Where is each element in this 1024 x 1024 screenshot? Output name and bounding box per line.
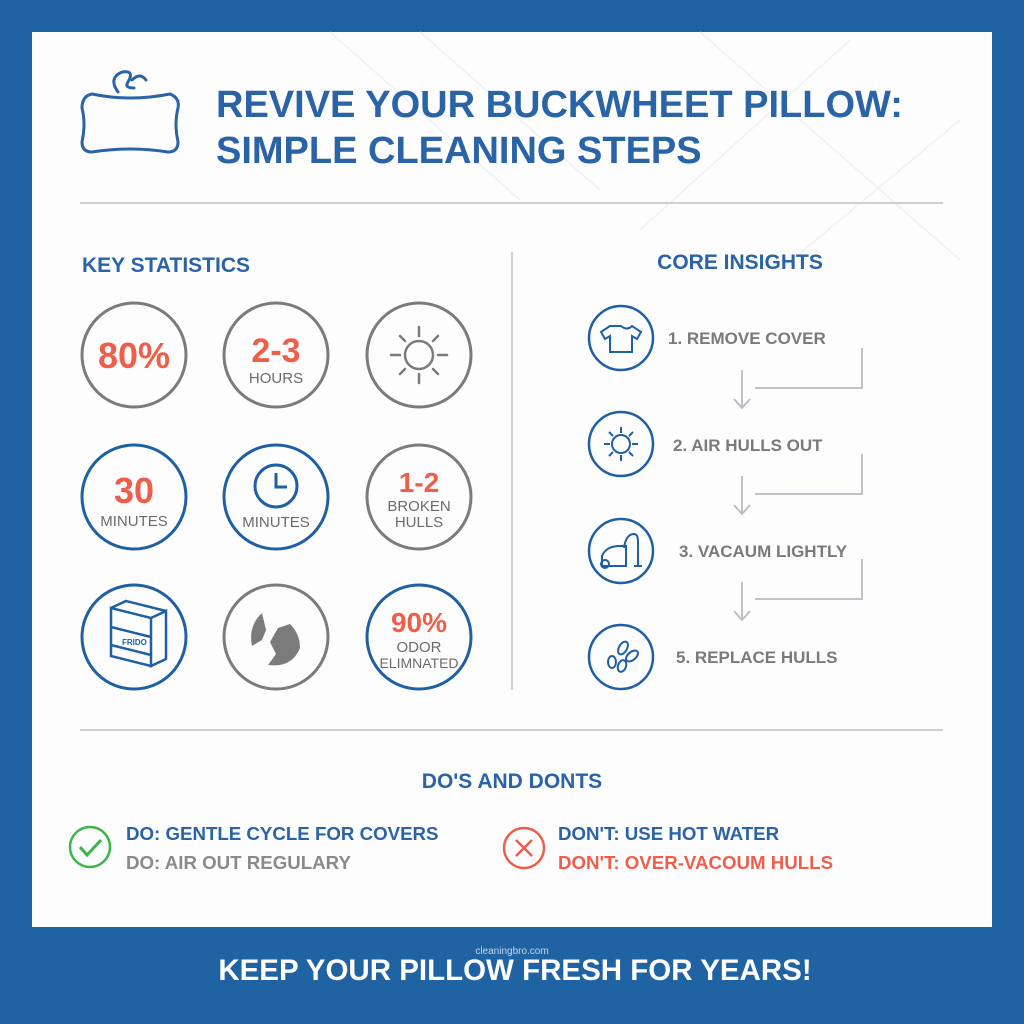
title: REVIVE YOUR BUCKWHEET PILLOW: (216, 84, 903, 126)
panel: statistics grid: HULLS (395, 514, 443, 531)
icon: shirt (601, 326, 641, 352)
text: KEEP YOUR PILLOW FRESH FOR YEARS! (218, 954, 812, 987)
panel: statistics grid: MINUTES (242, 514, 310, 531)
panel: steps flow: 5. REPLACE HULLS (676, 648, 838, 667)
heading: key statistics: KEY STATISTICS (82, 254, 250, 277)
icon: seeds (608, 640, 640, 673)
heading: core insights: CORE INSIGHTS (657, 251, 823, 274)
icon: vacuum (601, 534, 642, 568)
title (216, 84, 903, 172)
icon: box (111, 601, 166, 666)
arrows (734, 348, 862, 620)
panel: statistics grid: 1-2 (399, 467, 439, 498)
dont list: DON'T: OVER-VACOUM HULLS (558, 852, 833, 873)
do list (70, 823, 439, 873)
icon: box: FRIDO (122, 638, 147, 647)
do list: DO: GENTLE CYCLE FOR COVERS (126, 823, 439, 844)
icon: sun small (604, 427, 638, 461)
panel: steps flow: 3. VACAUM LIGHTLY (679, 542, 848, 561)
panel: statistics grid: 2-3 (251, 332, 301, 370)
panel: statistics grid: 90% (391, 607, 447, 638)
panel: statistics grid: 30 (114, 470, 154, 511)
panel: statistics grid: ODOR (396, 639, 442, 656)
icon: clock (255, 465, 297, 507)
panel: statistics grid (82, 303, 471, 689)
icon: broken hull (251, 613, 300, 665)
icon: pillow (82, 72, 178, 152)
dont list: DON'T: USE HOT WATER (558, 823, 780, 844)
panel: statistics grid: ELIMNATED (379, 655, 459, 671)
do list: DO: AIR OUT REGULARY (126, 852, 351, 873)
panel: statistics grid: BROKEN (387, 498, 451, 515)
heading: do's and donts: DO'S AND DONTS (422, 770, 602, 793)
footer: cleaningbro.com (475, 946, 549, 957)
title: SIMPLE CLEANING STEPS (216, 130, 702, 172)
panel: statistics grid: 80% (98, 335, 170, 376)
panel: steps flow (589, 306, 862, 689)
panel: steps flow: 2. AIR HULLS OUT (673, 436, 823, 455)
panel: statistics grid: MINUTES (100, 513, 168, 530)
panel: steps flow: 1. REMOVE COVER (668, 329, 826, 348)
dont list (504, 823, 833, 873)
icon: sun (391, 327, 447, 383)
panel: statistics grid: HOURS (249, 370, 303, 387)
